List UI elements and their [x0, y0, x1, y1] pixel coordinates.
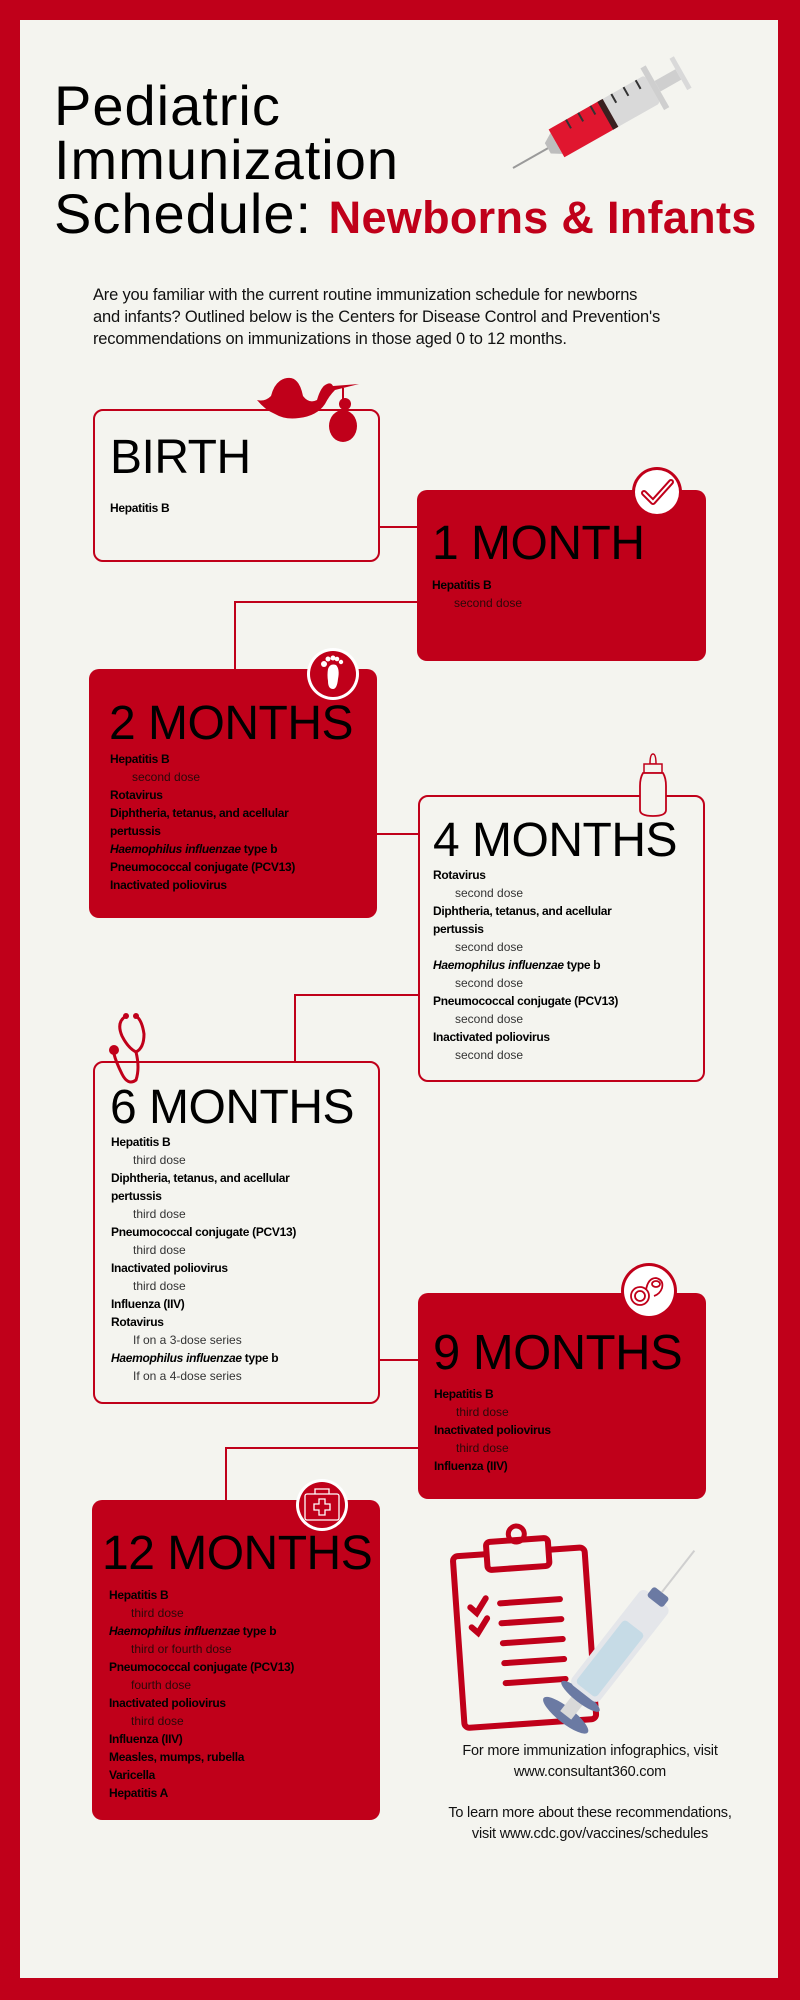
- list: 12 months: third or fourth dose: [131, 1642, 232, 1656]
- intro text: and infants? Outlined below is the Centers for Disease Control and Prevention's: [93, 308, 660, 326]
- list: 9 months: Inactivated poliovirus: [434, 1423, 551, 1437]
- list: 2 months: [110, 752, 295, 892]
- list: 2 months: Inactivated poliovirus: [110, 878, 227, 892]
- icon: stork: [257, 378, 359, 442]
- list: 6 months: Inactivated poliovirus: [111, 1261, 228, 1275]
- list: 6 months: If on a 4-dose series: [133, 1369, 242, 1383]
- list: 6 months: Haemophilus influenzae type b: [111, 1351, 278, 1365]
- title: Immunization: [54, 128, 399, 191]
- list: 12 months: Inactivated poliovirus: [109, 1696, 226, 1710]
- list: 4 months: second dose: [455, 940, 523, 954]
- heading: birth: BIRTH: [110, 431, 251, 484]
- icon: pacifier circle: [621, 1263, 677, 1316]
- icon: medical kit circle: [296, 1479, 348, 1531]
- list: 4 months: pertussis: [433, 922, 484, 936]
- list: 4 months: Diphtheria, tetanus, and acellular: [433, 904, 612, 918]
- footer text: To learn more about these recommendations,: [448, 1805, 732, 1821]
- list: 12 months: Measles, mumps, rubella: [109, 1750, 244, 1764]
- heading: 2 months: 2 MONTHS: [109, 697, 353, 750]
- icon: baby bottle: [639, 753, 667, 817]
- list: 4 months: Pneumococcal conjugate (PCV13): [433, 994, 618, 1008]
- heading: 6 months: 6 MONTHS: [110, 1081, 354, 1134]
- intro text: recommendations on immunizations in those aged 0 to 12 months.: [93, 330, 567, 348]
- list: 1 month: Hepatitis B: [432, 578, 491, 592]
- heading: 4 months: 4 MONTHS: [433, 814, 677, 867]
- list: 9 months: [434, 1387, 551, 1473]
- panel: 9 months: [418, 1293, 706, 1499]
- list: 12 months: Hepatitis A: [109, 1786, 168, 1800]
- heading: 1 month: 1 MONTH: [432, 517, 644, 570]
- panel: 1 month: [417, 490, 706, 661]
- list: 1 month: second dose: [454, 596, 522, 610]
- list: 4 months: Inactivated poliovirus: [433, 1030, 550, 1044]
- list: 6 months: Pneumococcal conjugate (PCV13): [111, 1225, 296, 1239]
- list: 12 months: Haemophilus influenzae type b: [109, 1624, 276, 1638]
- list: 6 months: third dose: [133, 1243, 186, 1257]
- list: 2 months: Pneumococcal conjugate (PCV13): [110, 860, 295, 874]
- list: 4 months: Rotavirus: [433, 868, 486, 882]
- heading: 9 months: 9 MONTHS: [433, 1326, 682, 1380]
- list: 12 months: third dose: [131, 1606, 184, 1620]
- footer text: [448, 1743, 732, 1842]
- list: 9 months: Influenza (IIV): [434, 1459, 508, 1473]
- list: 2 months: Haemophilus influenzae type b: [110, 842, 277, 856]
- list: 6 months: Diphtheria, tetanus, and acellular: [111, 1171, 290, 1185]
- illustration: clipboard and syringe: [450, 1524, 695, 1734]
- list: 2 months: Diphtheria, tetanus, and acellular: [110, 806, 289, 820]
- list: 6 months: pertussis: [111, 1189, 162, 1203]
- icon: footprint circle: [307, 648, 359, 700]
- list: 6 months: third dose: [133, 1153, 186, 1167]
- icon: check circle: [632, 467, 682, 514]
- list: 4 months: second dose: [455, 1048, 523, 1062]
- list: 2 months: pertussis: [110, 824, 161, 838]
- icon: stethoscope: [109, 1013, 146, 1084]
- panel: 12 months: [92, 1500, 380, 1820]
- icon: syringe top: [512, 56, 692, 169]
- title: [54, 74, 757, 245]
- list: 2 months: Rotavirus: [110, 788, 163, 802]
- heading: 12 months: 12 MONTHS: [102, 1527, 372, 1580]
- panel: 6 months: [93, 1061, 380, 1404]
- panel: birth: [93, 409, 380, 562]
- list: 12 months: fourth dose: [131, 1678, 191, 1692]
- list: 12 months: Pneumococcal conjugate (PCV13): [109, 1660, 294, 1674]
- list: 4 months: [433, 868, 618, 1062]
- list: 9 months: third dose: [456, 1441, 509, 1455]
- list: 2 months: second dose: [132, 770, 200, 784]
- list: 12 months: Hepatitis B: [109, 1588, 168, 1602]
- list: 6 months: If on a 3-dose series: [133, 1333, 242, 1347]
- list: 6 months: Influenza (IIV): [111, 1297, 185, 1311]
- list: 6 months: third dose: [133, 1279, 186, 1293]
- list: 9 months: Hepatitis B: [434, 1387, 493, 1401]
- intro text: [93, 286, 660, 348]
- list: 1 month: [432, 578, 522, 610]
- list: 9 months: third dose: [456, 1405, 509, 1419]
- list: 6 months: Hepatitis B: [111, 1135, 170, 1149]
- list: 4 months: second dose: [455, 976, 523, 990]
- list: 12 months: Influenza (IIV): [109, 1732, 183, 1746]
- list: 6 months: third dose: [133, 1207, 186, 1221]
- footer text: For more immunization infographics, visit: [462, 1743, 718, 1759]
- intro text: Are you familiar with the current routine immunization schedule for newborns: [93, 286, 637, 304]
- title: Pediatric: [54, 74, 281, 137]
- title: Schedule: Newborns & Infants: [54, 182, 757, 245]
- list: 12 months: Varicella: [109, 1768, 155, 1782]
- footer text: www.consultant360.com: [514, 1764, 666, 1780]
- list: 4 months: Haemophilus influenzae type b: [433, 958, 600, 972]
- list: birth: Hepatitis B: [110, 501, 169, 515]
- footer text: visit www.cdc.gov/vaccines/schedules: [472, 1826, 708, 1842]
- list: 4 months: second dose: [455, 886, 523, 900]
- list: 2 months: Hepatitis B: [110, 752, 169, 766]
- list: 12 months: third dose: [131, 1714, 184, 1728]
- panel: 4 months: [418, 795, 705, 1082]
- panel: 2 months: [89, 669, 377, 918]
- list: 6 months: [111, 1135, 296, 1383]
- list: 4 months: second dose: [455, 1012, 523, 1026]
- connector lines: [380, 526, 418, 528]
- list: 6 months: Rotavirus: [111, 1315, 164, 1329]
- list: 12 months: [109, 1588, 294, 1800]
